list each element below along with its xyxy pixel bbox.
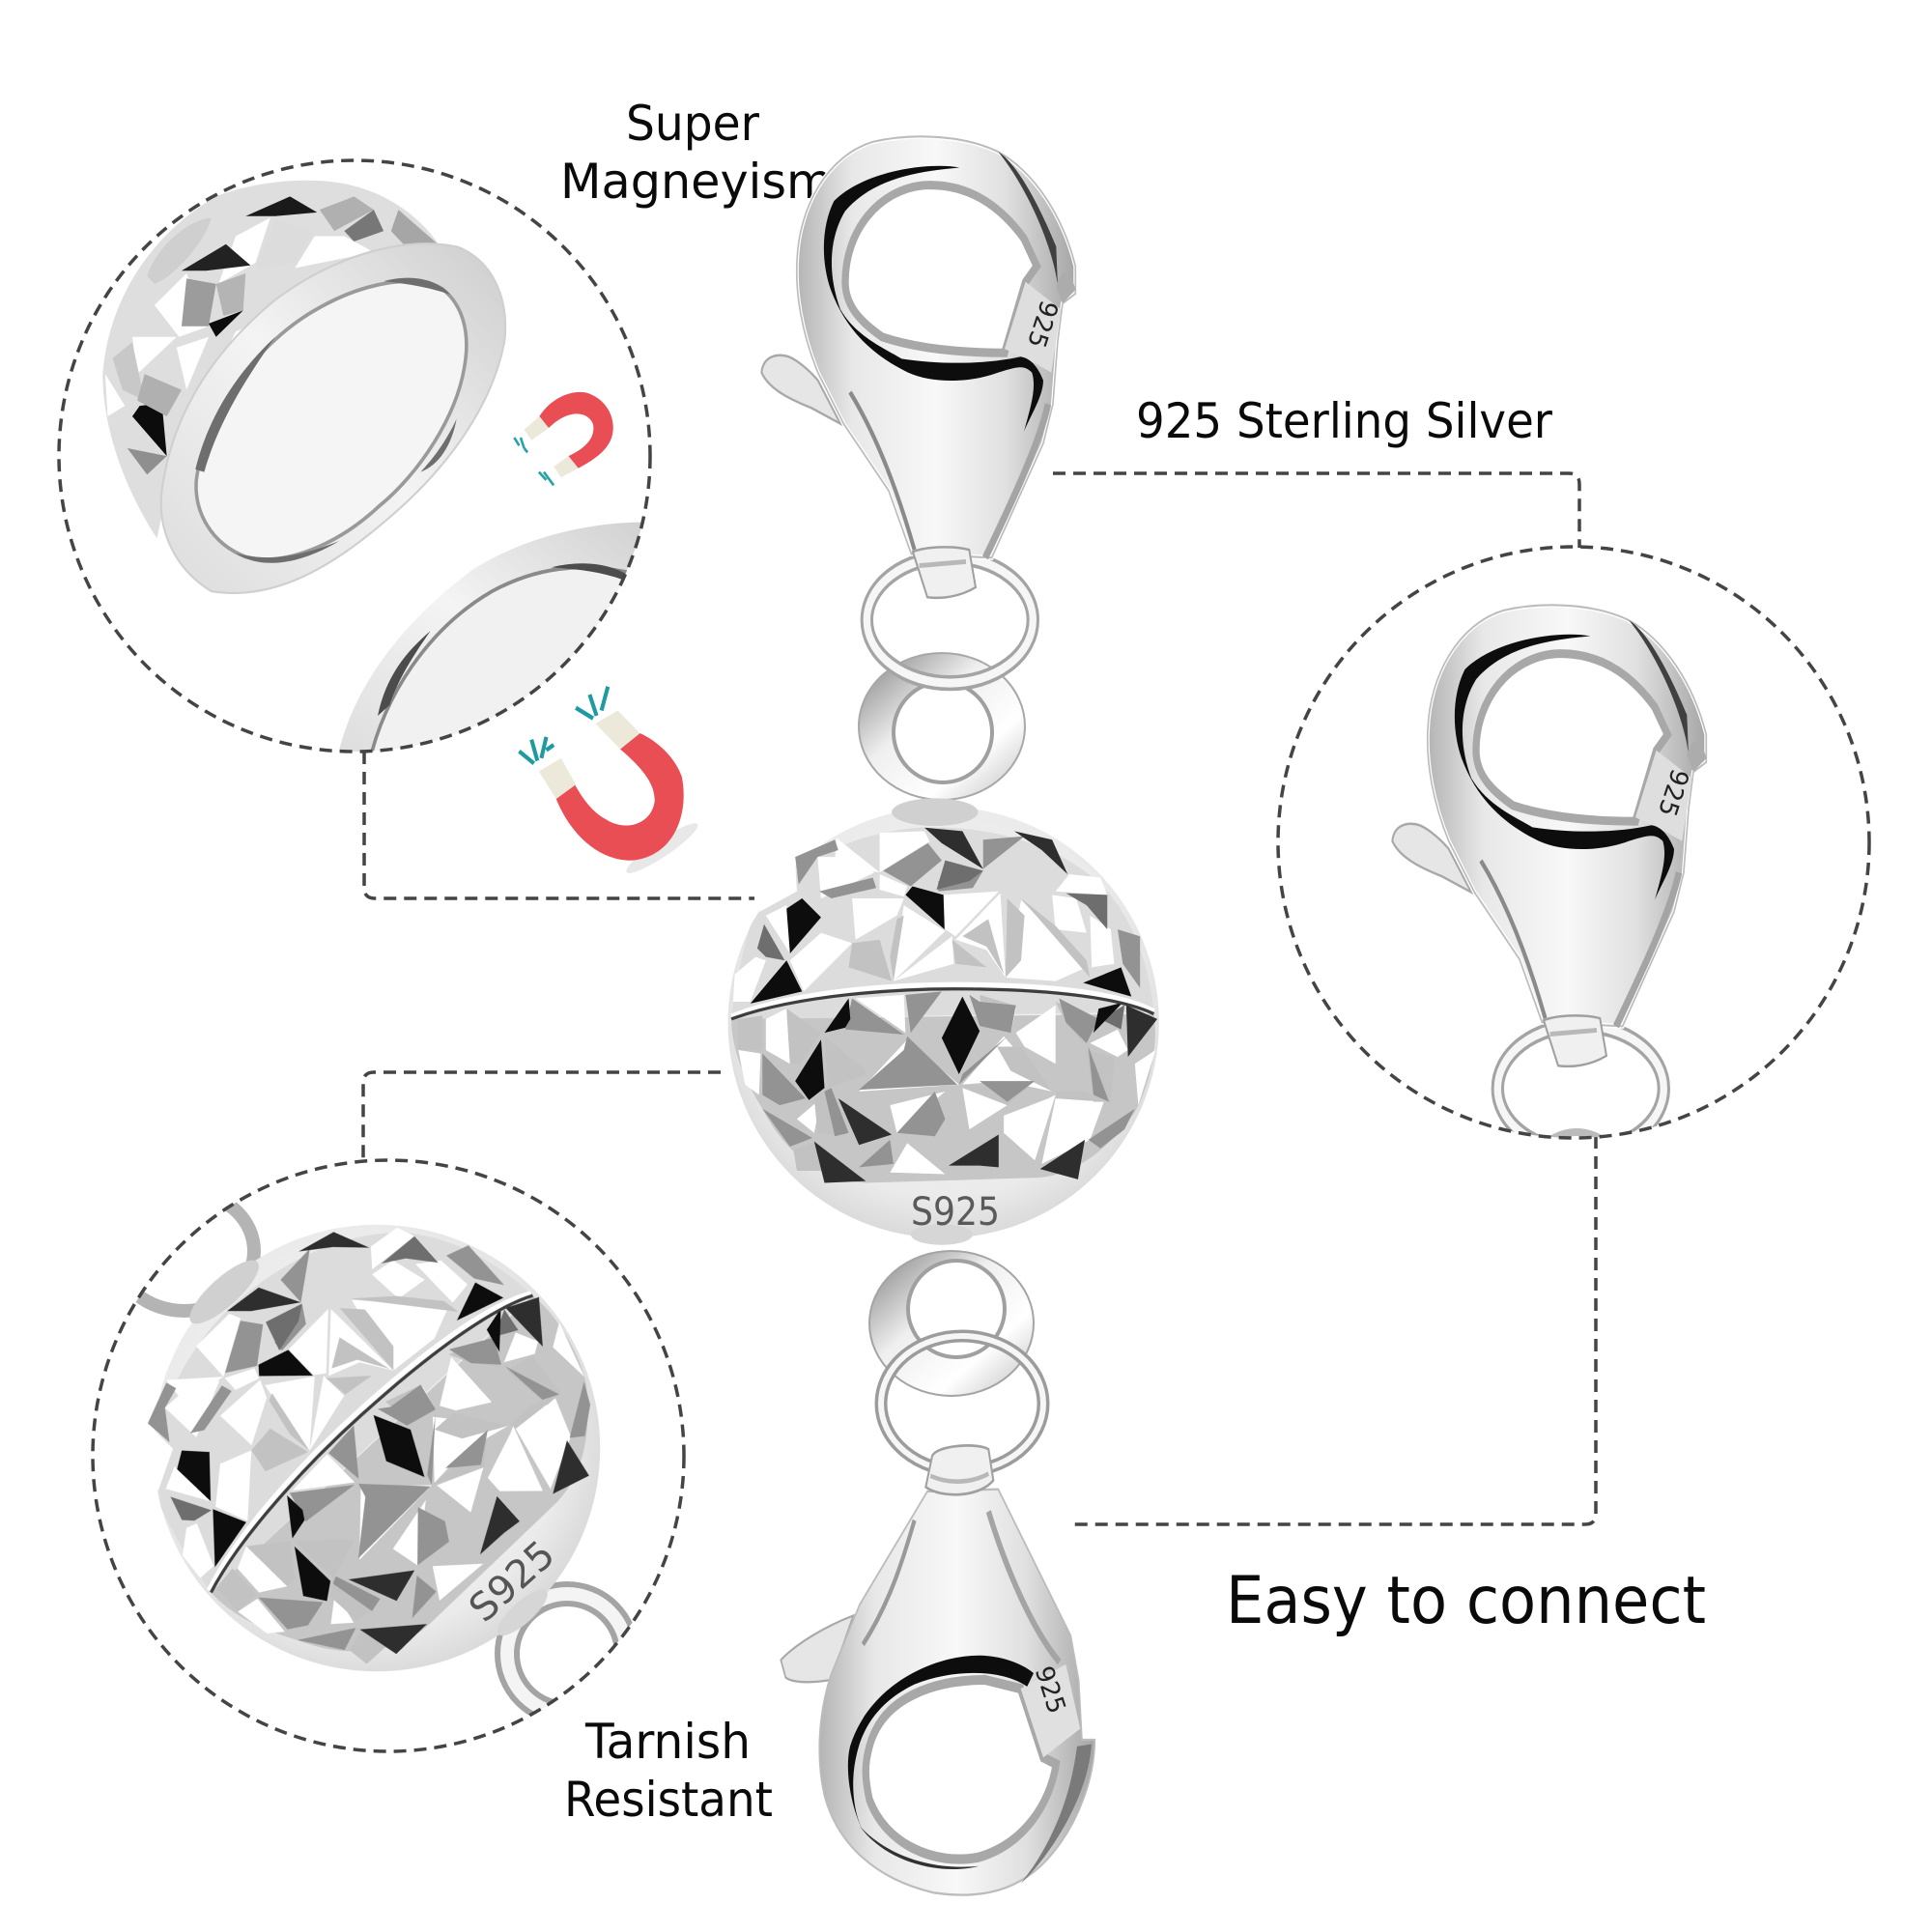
connector: lower right callout (1069, 1136, 1596, 1524)
heading: Super Magneyism: Super (626, 96, 759, 152)
panel: tarnish resistant ball circle (91, 1158, 686, 1753)
heading: Super Magneyism: Magneyism (560, 154, 833, 210)
product: bottom jump ring (881, 1336, 1043, 1471)
product: top lobster clasp (761, 136, 1075, 683)
heading: Tarnish Resistant (564, 1714, 773, 1828)
facets of the half ball (102, 181, 440, 538)
heading: Tarnish Resistant: Resistant (564, 1772, 773, 1828)
connector: tarnish callout (363, 1072, 721, 1158)
connector: magnet callout (364, 752, 754, 898)
engraving 925 bottom: 925 (1029, 1662, 1071, 1718)
panel: magnet closeup circle (59, 160, 679, 766)
product: upper ball ring (859, 653, 1025, 800)
panel: clasp closeup circle (1276, 545, 1871, 1140)
engraving on closeup clasp: 925 (1652, 765, 1694, 820)
connector: top right callout (1053, 473, 1579, 548)
product: faceted magnetic ball (728, 798, 1159, 1245)
magnet disc upper (161, 243, 505, 593)
heading: Tarnish Resistant: Tarnish (584, 1714, 751, 1770)
icon: large horseshoe magnet (519, 687, 702, 879)
heading: Super Magneyism (560, 96, 833, 210)
icon: small horseshoe magnet (514, 392, 613, 485)
heading: 925 Sterling Silver: 925 Sterling Silver (1136, 393, 1552, 449)
product: lower ball ring (869, 1251, 1034, 1396)
engraving 925 top: 925 (1021, 297, 1064, 352)
magnet disc lower (339, 522, 641, 752)
product: bottom lobster clasp (781, 1445, 1094, 1895)
heading: Easy to connect: Easy to connect (1226, 1563, 1706, 1639)
engraving on closeup ball: S925 (461, 1532, 563, 1631)
engraving S925: S925 (911, 1190, 1000, 1235)
